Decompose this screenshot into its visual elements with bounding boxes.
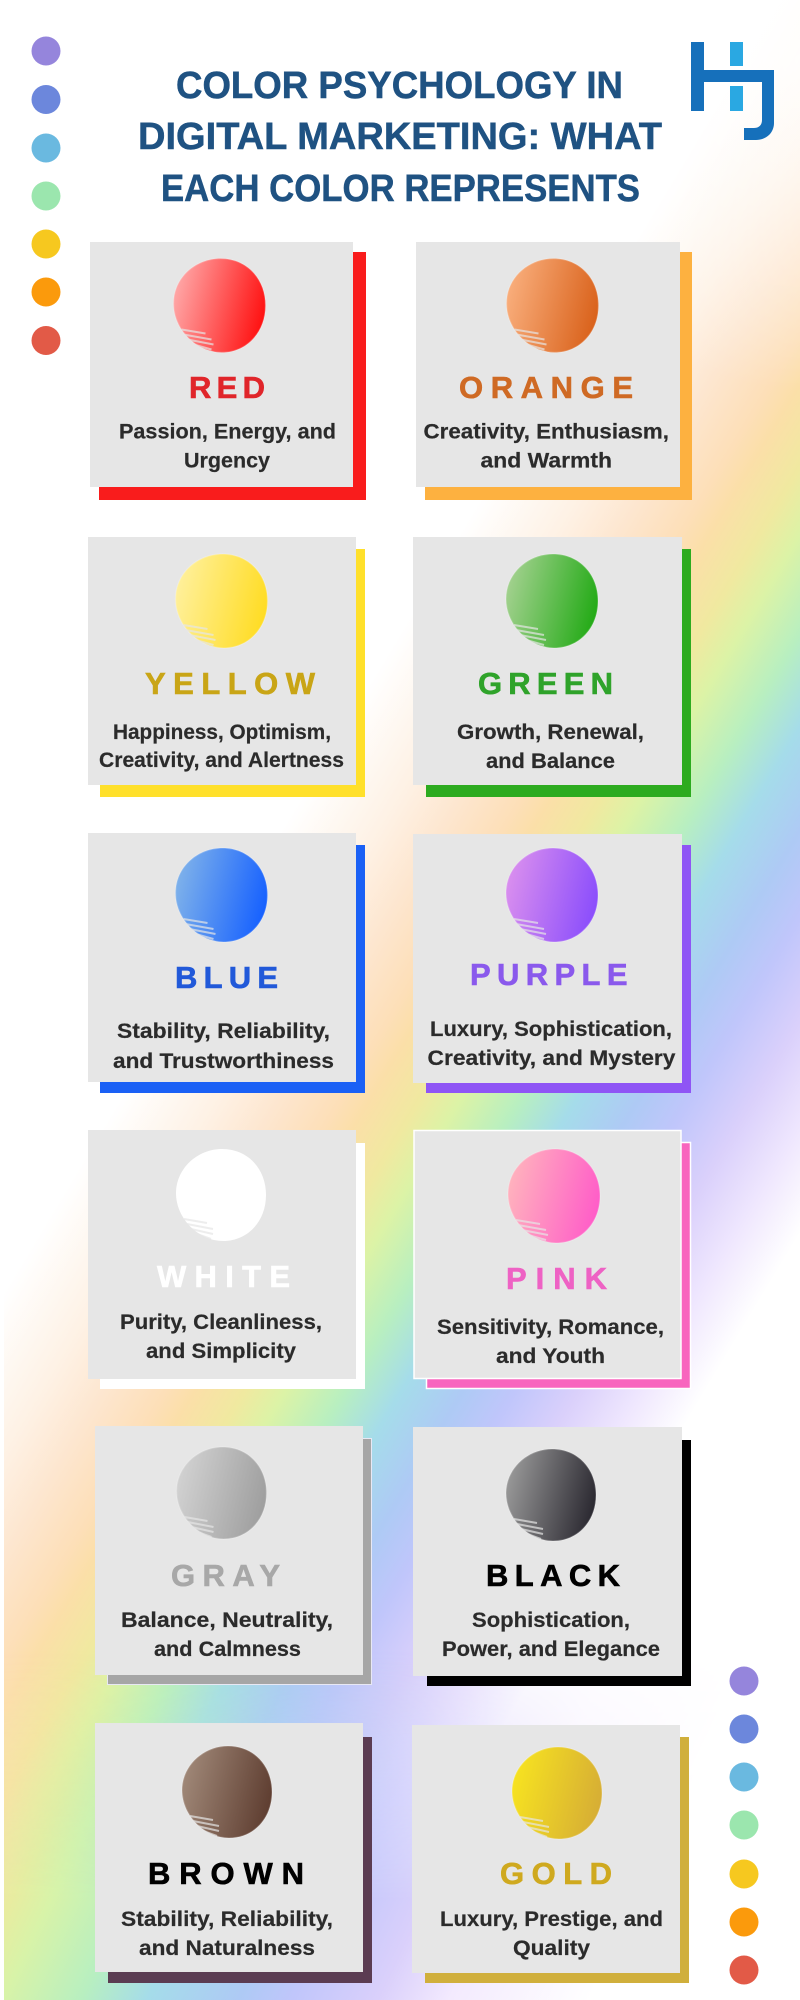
description: Stability, Reliability, xyxy=(117,1019,330,1043)
icon: pink brush circle xyxy=(508,1149,600,1243)
description xyxy=(442,1608,660,1661)
description xyxy=(440,1907,663,1960)
description: Luxury, Sophistication, xyxy=(430,1017,672,1041)
label: WHITE: WHITE xyxy=(157,1259,290,1294)
description: Balance, Neutrality, xyxy=(121,1608,333,1632)
description xyxy=(457,720,644,773)
title: DIGITAL MARKETING: WHAT xyxy=(138,116,662,158)
label: GRAY: GRAY xyxy=(171,1558,280,1593)
icon: blue brush circle xyxy=(176,848,268,942)
description xyxy=(99,720,344,772)
decorative dots: bottom right xyxy=(730,1666,758,1984)
description: Stability, Reliability, xyxy=(121,1907,333,1931)
icon: gold brush circle xyxy=(512,1747,602,1839)
description: Creativity, and Alertness xyxy=(99,748,344,772)
description: and Trustworthiness xyxy=(113,1049,334,1073)
background: lower gradient blend xyxy=(4,1694,562,2000)
panel: pink xyxy=(414,1130,690,1388)
description xyxy=(119,420,336,472)
panel: black xyxy=(413,1427,691,1686)
description: Growth, Renewal, xyxy=(457,720,644,744)
description: and Youth xyxy=(496,1344,605,1368)
label: PINK: PINK xyxy=(506,1261,608,1296)
description: and Simplicity xyxy=(146,1339,296,1363)
panel: orange xyxy=(416,242,692,500)
description: Sophistication, xyxy=(472,1608,630,1632)
panel: green xyxy=(413,537,691,797)
label: BROWN: BROWN xyxy=(148,1856,304,1891)
description: Creativity, Enthusiasm, xyxy=(424,420,669,444)
title xyxy=(138,65,662,210)
icon: brown brush circle xyxy=(182,1746,272,1838)
description: Creativity, and Mystery xyxy=(428,1046,676,1070)
description: and Calmness xyxy=(154,1637,301,1661)
description: Quality xyxy=(513,1936,590,1960)
icon: yellow brush circle xyxy=(176,554,268,648)
panel: brown xyxy=(95,1723,372,1983)
description: Urgency xyxy=(184,448,270,472)
description xyxy=(121,1907,333,1960)
description: Purity, Cleanliness, xyxy=(120,1310,322,1334)
description xyxy=(424,420,669,472)
description: Happiness, Optimism, xyxy=(113,720,331,744)
label: GOLD: GOLD xyxy=(500,1856,612,1891)
panel: blue xyxy=(88,833,365,1093)
description xyxy=(113,1019,334,1073)
label: YELLOW: YELLOW xyxy=(145,666,316,701)
panel: white xyxy=(88,1130,365,1389)
description: Passion, Energy, and xyxy=(119,420,336,444)
icon: purple brush circle xyxy=(506,848,598,942)
label: BLACK: BLACK xyxy=(486,1558,621,1593)
description: Luxury, Prestige, and xyxy=(440,1907,663,1931)
icon: black brush circle xyxy=(506,1449,596,1541)
panel: yellow xyxy=(88,537,365,797)
label: PURPLE: PURPLE xyxy=(470,957,628,992)
description xyxy=(437,1315,664,1368)
panel: gray xyxy=(95,1426,372,1684)
description: Sensitivity, Romance, xyxy=(437,1315,664,1339)
description xyxy=(121,1608,333,1661)
description: and Naturalness xyxy=(139,1936,315,1960)
icon: orange brush circle xyxy=(506,258,598,352)
label: ORANGE: ORANGE xyxy=(459,370,633,405)
panel: purple xyxy=(413,834,691,1093)
logo: HJ monogram xyxy=(691,42,774,140)
label: BLUE: BLUE xyxy=(175,960,278,995)
icon: red brush circle xyxy=(174,258,266,352)
description: and Warmth xyxy=(480,448,612,472)
icon: white brush circle xyxy=(176,1149,266,1241)
icon: green brush circle xyxy=(506,554,598,648)
description xyxy=(428,1017,676,1070)
description xyxy=(120,1310,322,1363)
icon: gray brush circle xyxy=(176,1447,266,1539)
title: COLOR PSYCHOLOGY IN xyxy=(176,65,623,107)
background: white left edge xyxy=(0,0,4,2000)
panel: red xyxy=(90,242,366,500)
label: GREEN: GREEN xyxy=(478,666,613,701)
title: EACH COLOR REPRESENTS xyxy=(161,168,640,210)
label: RED: RED xyxy=(189,370,265,405)
description: and Balance xyxy=(486,749,615,773)
description: Power, and Elegance xyxy=(442,1637,660,1661)
decorative dots: top left xyxy=(32,36,60,355)
panel: gold xyxy=(412,1725,689,1983)
